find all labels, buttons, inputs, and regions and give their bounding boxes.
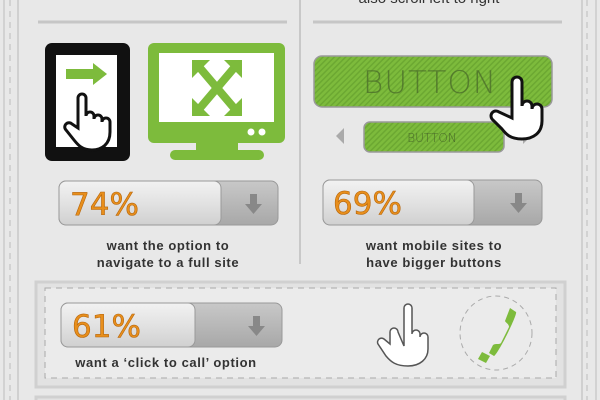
stat bar: 61% [61,303,282,347]
caption: 69%: want mobile sites to [365,238,502,253]
caption: 61%: want a ‘click to call’ option [74,355,257,370]
stat bar: 74% [59,181,278,225]
icon: outline hand [378,304,428,366]
icon: small button with arrows [336,122,531,152]
icon: monitor with expand arrows [148,43,285,160]
icon: small button with arrows: BUTTON [407,131,457,145]
caption: 74%: want the option to [106,238,229,253]
caption: 74%: navigate to a full site [97,255,239,270]
caption: 69%: have bigger buttons [366,255,502,270]
caption: 74% [97,238,239,270]
stat bar: 74%: 74% [70,187,139,223]
icon: big button [314,56,552,107]
stat bar: 69% [323,180,542,225]
stat bar: 61%: 61% [72,309,141,345]
panel: click to call [36,282,565,387]
icon: big button: BUTTON [363,65,497,101]
stat bar: 69%: 69% [333,186,402,222]
icon: hand pointer on button [491,77,542,139]
caption: 69% [365,238,502,270]
icon: tablet with hand [45,43,130,161]
icon: phone in dashed circle [460,296,532,370]
